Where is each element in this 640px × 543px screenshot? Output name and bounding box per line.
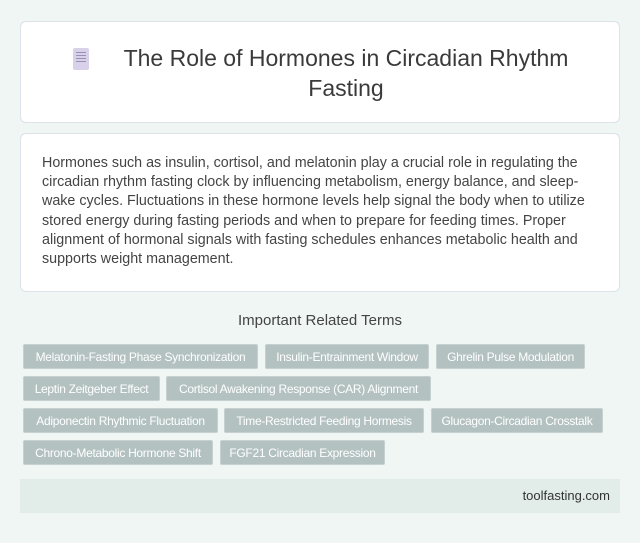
- footer text: toolfasting.com: [523, 488, 610, 503]
- tags: Glucagon-Circadian Crosstalk: [442, 414, 592, 428]
- description text: wake cycles. Fluctuations in these hormone levels help signal the body when to utilize: [42, 193, 585, 209]
- tags: Leptin Zeitgeber Effect: [35, 382, 148, 396]
- footer: [20, 479, 620, 513]
- tags: Ghrelin Pulse Modulation: [447, 350, 574, 364]
- title: Fasting: [308, 75, 384, 101]
- related terms heading: Important Related Terms: [238, 312, 402, 329]
- tags: Time-Restricted Feeding Hormesis: [236, 414, 412, 428]
- title: The Role of Hormones in Circadian Rhythm: [124, 45, 568, 71]
- description text: stored energy during fasting periods and when to prepare for feeding times. Proper: [42, 213, 566, 229]
- tags: Adiponectin Rhythmic Fluctuation: [36, 414, 205, 428]
- description card: [20, 133, 620, 292]
- tags: Cortisol Awakening Response (CAR) Alignment: [179, 382, 418, 396]
- icon: document: [73, 48, 89, 70]
- tags: Melatonin-Fasting Phase Synchronization: [36, 350, 245, 364]
- description text: supports weight management.: [42, 251, 234, 267]
- tags: FGF21 Circadian Expression: [229, 446, 376, 460]
- title card: [20, 21, 620, 123]
- tags: [23, 344, 603, 465]
- title: [124, 45, 568, 101]
- description text: circadian rhythm fasting clock by influencing metabolism, energy balance, and sleep-: [42, 174, 578, 190]
- description text: alignment of hormonal signals with fasting schedules enhances metabolic health and: [42, 232, 578, 248]
- description text: Hormones such as insulin, cortisol, and melatonin play a crucial role in regulating the: [42, 155, 578, 171]
- tags: Insulin-Entrainment Window: [276, 350, 418, 364]
- tags: Chrono-Metabolic Hormone Shift: [35, 446, 201, 460]
- description text: [42, 155, 585, 267]
